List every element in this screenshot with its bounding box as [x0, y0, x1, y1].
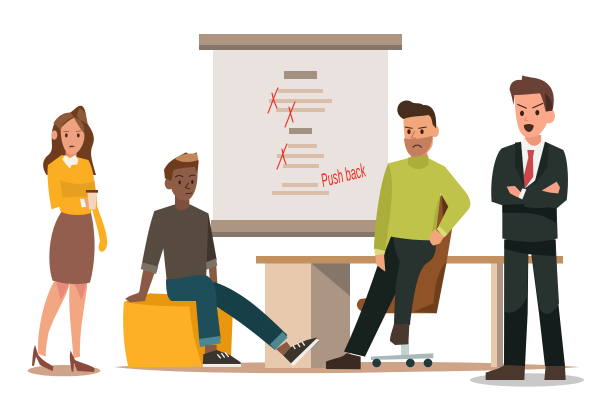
high heels — [32, 345, 53, 371]
desk top — [256, 256, 563, 264]
far shoe — [326, 353, 361, 369]
far leg — [213, 282, 287, 350]
hair — [164, 152, 199, 181]
shoes — [486, 365, 525, 380]
ground shadow — [470, 373, 584, 387]
legs — [504, 240, 528, 366]
far arm — [208, 260, 217, 283]
front hair strands — [53, 108, 88, 133]
tie — [524, 150, 534, 188]
jacket — [491, 142, 568, 242]
near arm lower and hand — [125, 270, 155, 302]
head — [170, 162, 198, 201]
person: woman with coffee — [28, 106, 107, 376]
board bottom rail — [211, 220, 391, 237]
facial features — [175, 175, 195, 194]
facial features — [517, 103, 543, 132]
handwritten note: Push back: Push back — [319, 160, 369, 192]
collar — [62, 155, 78, 169]
desk right leg — [491, 263, 503, 367]
far shoe — [283, 338, 319, 366]
near leg — [393, 233, 436, 325]
sweater — [374, 158, 470, 252]
sweater — [142, 204, 217, 280]
waist band — [504, 239, 556, 256]
neck and shirt — [522, 130, 545, 187]
jacket shadows — [502, 204, 557, 223]
skirt — [49, 212, 95, 284]
hair — [43, 106, 96, 175]
hair — [510, 75, 554, 112]
near leg — [166, 275, 221, 341]
near shoe — [203, 350, 241, 367]
hands — [507, 186, 522, 197]
person: man in green sweater — [326, 101, 470, 369]
head — [525, 135, 541, 146]
neck — [411, 150, 427, 162]
near shoe — [390, 324, 409, 345]
yellow cube seat — [123, 293, 233, 367]
office chair — [357, 192, 456, 367]
board screen — [213, 50, 388, 222]
document lines — [269, 71, 332, 195]
ground shadow — [28, 365, 100, 376]
far arm — [92, 207, 107, 252]
board top rail — [199, 34, 402, 50]
hair — [397, 101, 436, 128]
far leg — [344, 232, 417, 357]
face and neck — [66, 150, 77, 160]
floor shadow — [114, 362, 580, 373]
far ankle — [276, 342, 292, 356]
red cross marks — [268, 88, 295, 169]
crossed arms — [492, 185, 522, 205]
presentation board — [199, 34, 402, 237]
head — [403, 113, 435, 157]
yellow sweater — [48, 155, 97, 215]
facial features — [63, 131, 81, 147]
person: seated man in brown sweater — [125, 152, 319, 367]
facial features — [405, 127, 427, 148]
coffee cup and hand — [80, 190, 98, 209]
legs — [38, 282, 70, 357]
neck — [175, 195, 189, 210]
near ankle — [205, 345, 217, 354]
person: man in dark suit — [470, 75, 584, 387]
hands — [375, 254, 385, 272]
desk — [256, 256, 563, 368]
desk left leg — [265, 263, 350, 368]
